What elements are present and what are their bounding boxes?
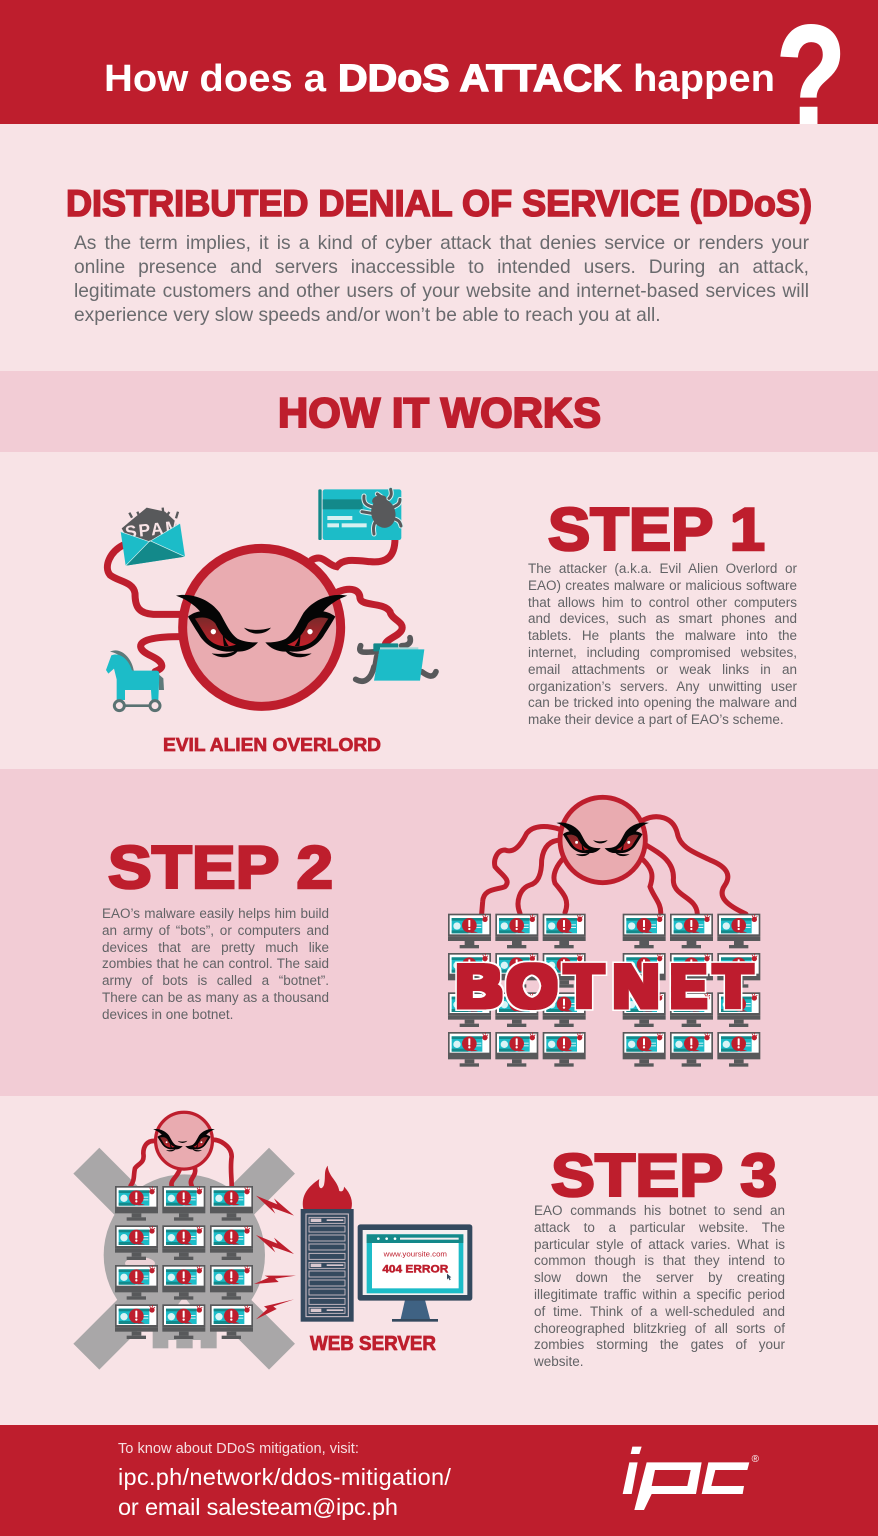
band: how it works: HOW IT WORKS: [278, 389, 601, 436]
text block: step 1: internet, including compromised websites,: [528, 645, 797, 660]
label: botnet: [456, 953, 752, 1020]
text block: step 1: EAO) creates malware or malicious software: [528, 578, 797, 593]
text block: step 1: The attacker (a.k.a. Evil Alien Overlord or: [528, 561, 797, 576]
text block: step 2: an army of “bots”, or computers and: [102, 923, 329, 938]
skull and crossbones backdrop: [86, 1161, 282, 1357]
overlord face: [153, 1112, 215, 1169]
label: botnet: T: [565, 953, 603, 1020]
text block: step 1: make their device a part of EAO’s scheme.: [528, 712, 784, 727]
text block: step 1: organization’s servers. Any unwitting user: [528, 679, 797, 694]
heading: step 2: STEP 2: [108, 834, 333, 901]
lightning bolts: [254, 1196, 296, 1319]
logo: ipc: [623, 1447, 760, 1510]
footer: call to action text: [118, 1441, 451, 1520]
monitor grid: [448, 914, 760, 1067]
text block: step 2: devices in one botnet.: [102, 1007, 233, 1022]
label: botnet: O: [507, 953, 557, 1020]
icon: spam envelope: [121, 508, 185, 566]
text block: step 3: of time. Think of a well-scheduled and: [534, 1304, 785, 1319]
text block: step 3: zombies storming the gates of your: [534, 1337, 785, 1352]
illustration: botnet: [448, 797, 760, 1067]
panel background: step 2: [0, 769, 878, 1096]
header banner: DDoS ATTACK: [338, 58, 623, 100]
text block: step 3: [534, 1203, 785, 1369]
label: evil alien overlord: EVIL ALIEN OVERLORD: [163, 735, 381, 755]
footer: call to action text: ipc.ph/network/ddos-mitigation/: [118, 1464, 451, 1490]
icon: infected folder with worm tentacles: [356, 638, 436, 681]
text block: ddos definition: legitimate customers and other users of your website and internet-based services will: [74, 281, 809, 302]
text block: step 2: devices that are pretty much like: [102, 940, 329, 955]
icon: server rack: [301, 1209, 354, 1322]
label: botnet: T: [714, 953, 752, 1020]
text block: step 3: attack to a particular website. The: [534, 1220, 785, 1235]
label: botnet: E: [671, 953, 706, 1020]
heading: step 1: STEP 1: [548, 496, 765, 563]
text block: step 3: common though is that they intend to: [534, 1253, 785, 1268]
icon: monitor with 404 error: [358, 1224, 472, 1322]
panel background: footer: [0, 1425, 878, 1536]
text block: step 1: and devices, such as smart phones and: [528, 611, 797, 626]
icon: monitor with 404 error: www.yoursite.com: [383, 1251, 447, 1258]
text block: step 3: choreographed blitzkrieg of all sorts of: [534, 1321, 785, 1336]
header banner: How does a: [104, 58, 327, 100]
text block: step 2: zombies that he can control. The said: [102, 956, 329, 971]
text block: step 1: tablets. He plants the malware into the: [528, 628, 797, 643]
icon: trojan horse: [106, 650, 164, 711]
text block: step 3: slow down the server by creating: [534, 1270, 785, 1285]
header banner: [0, 0, 878, 124]
icon: flames: [303, 1166, 352, 1209]
text block: step 2: EAO’s malware easily helps him build: [102, 906, 329, 921]
footer: call to action text: or email salesteam@ipc.ph: [118, 1494, 398, 1520]
overlord face: [556, 797, 649, 883]
text block: step 1: [528, 561, 797, 727]
text block: step 2: army of bots is called a “botnet”.: [102, 973, 329, 988]
text block: step 2: There can be as many as a thousand: [102, 990, 329, 1005]
text block: ddos definition: online presence and servers inaccessible to intended users. During an attack,: [74, 257, 809, 278]
text block: step 3: EAO commands his botnet to send an: [534, 1203, 785, 1218]
label: web server: WEB SERVER: [310, 1333, 437, 1355]
text block: step 3: illegitimate traffic within a specific period: [534, 1287, 785, 1302]
monitor grid: [115, 1186, 253, 1339]
text block: ddos definition: experience very slow speeds and/or won’t be able to reach you at all.: [74, 305, 661, 326]
label: botnet: B: [456, 953, 502, 1020]
text block: ddos definition: As the term implies, it is a kind of cyber attack that denies service or renders your: [74, 233, 809, 254]
text block: step 1: can be tricked into opening the malware and: [528, 695, 797, 710]
header banner: happen: [633, 58, 775, 100]
logo: ipc: ®: [752, 1454, 760, 1465]
heading: step 3: STEP 3: [551, 1142, 777, 1209]
text block: step 2: [102, 906, 329, 1022]
text block: step 3: website.: [534, 1354, 584, 1369]
band: how it works: [0, 371, 878, 452]
icon: infected credit card with bug: [318, 489, 401, 540]
label: botnet: N: [613, 953, 659, 1020]
icon: monitor with 404 error: 404 ERROR: [382, 1264, 448, 1276]
illustration: evil alien overlord with malware vectors: [106, 489, 436, 711]
text block: step 3: particular style of attack varies. What is: [534, 1237, 785, 1252]
illustration: attack on web server: [86, 1112, 472, 1357]
text block: step 1: email attachments or weak links in an: [528, 662, 797, 677]
main heading: distributed denial of service: DISTRIBUTED DENIAL OF SERVICE (DDoS): [66, 183, 812, 224]
icon: spam envelope: SPAM: [124, 516, 181, 542]
text block: ddos definition: [74, 233, 809, 326]
text block: step 1: that allows him to control other computers: [528, 595, 797, 610]
footer: call to action text: To know about DDoS mitigation, visit:: [118, 1441, 359, 1457]
